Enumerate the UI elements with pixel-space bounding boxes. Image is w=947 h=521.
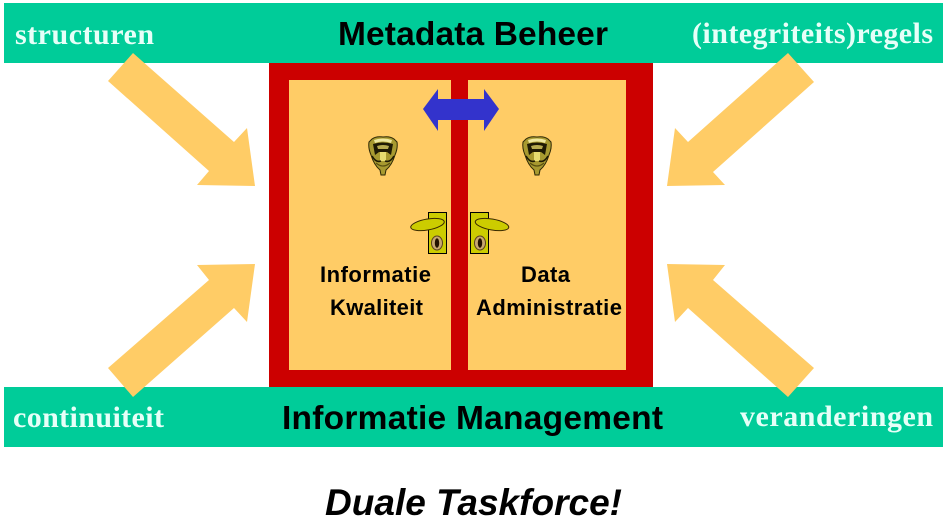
left door: [289, 80, 451, 370]
panel: bottom bar: [4, 387, 943, 447]
icon: left door knocker: [369, 137, 397, 175]
arrow: blue double-headed: [423, 89, 499, 131]
text: Data Administratie: Data: [521, 262, 571, 287]
icon: left door handle: [410, 212, 446, 254]
arrow: top-left: [108, 53, 255, 186]
text: Data Administratie: [476, 262, 622, 320]
heading: Informatie Management: Informatie Management: [282, 400, 663, 437]
arrow: bottom-right: [667, 264, 814, 397]
panel: top bar: [4, 3, 943, 63]
label: continuiteit: continuiteit: [13, 401, 164, 434]
text: Informatie Kwaliteit: [320, 262, 431, 320]
right door: [468, 80, 626, 370]
label: structuren: structuren: [15, 18, 154, 51]
text: Informatie Kwaliteit: Kwaliteit: [330, 295, 424, 320]
label: integriteitsregels: (integriteits)regels: [692, 17, 933, 50]
text: Informatie Kwaliteit: Informatie: [320, 262, 431, 287]
icon: right door handle: [470, 212, 510, 254]
icon: right door knocker: [523, 137, 551, 175]
heading: Metadata Beheer: Metadata Beheer: [338, 16, 608, 53]
label: veranderingen: veranderingen: [740, 400, 933, 433]
arrow: bottom-left: [108, 264, 255, 397]
arrow: top-right: [667, 53, 814, 186]
text: Data Administratie: Administratie: [476, 295, 622, 320]
panel: double door: [269, 63, 653, 387]
